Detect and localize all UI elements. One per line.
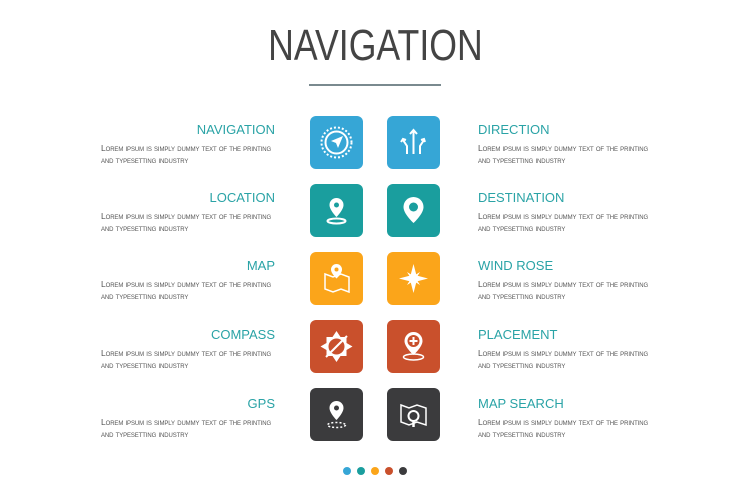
label: map search: MAP SEARCH xyxy=(478,396,564,411)
label: direction: DIRECTION xyxy=(478,122,550,137)
text: gps xyxy=(101,417,271,439)
text: destination: and typesetting industry xyxy=(478,223,565,233)
text: direction: Lorem ipsum is simply dummy text of the printing xyxy=(478,143,648,153)
label: navigation: NAVIGATION xyxy=(197,122,275,137)
label: placement: PLACEMENT xyxy=(478,327,557,342)
icon: destination xyxy=(387,184,440,237)
label: compass: COMPASS xyxy=(211,327,275,342)
icon: map search xyxy=(387,388,440,441)
text: destination: Lorem ipsum is simply dummy text of the printing xyxy=(478,211,648,221)
text: location xyxy=(101,211,271,233)
label: location: LOCATION xyxy=(210,190,275,205)
icon: wind rose xyxy=(387,252,440,305)
text: map: and typesetting industry xyxy=(101,291,188,301)
text: compass: Lorem ipsum is simply dummy text of the printing xyxy=(101,348,271,358)
icon: gps xyxy=(310,388,363,441)
text: compass xyxy=(101,348,271,370)
text: map search xyxy=(478,417,648,439)
label: destination: DESTINATION xyxy=(478,190,564,205)
icon: placement xyxy=(387,320,440,373)
text: gps: and typesetting industry xyxy=(101,429,188,439)
text: map search: and typesetting industry xyxy=(478,429,565,439)
text: destination xyxy=(478,211,648,233)
text: wind rose: Lorem ipsum is simply dummy text of the printing xyxy=(478,279,648,289)
label: map: MAP xyxy=(247,258,275,273)
text: location: and typesetting industry xyxy=(101,223,188,233)
text: navigation: and typesetting industry xyxy=(101,155,188,165)
text: gps: Lorem ipsum is simply dummy text of the printing xyxy=(101,417,271,427)
text: wind rose xyxy=(478,279,648,301)
text: navigation: Lorem ipsum is simply dummy text of the printing xyxy=(101,143,271,153)
text: map: Lorem ipsum is simply dummy text of the printing xyxy=(101,279,271,289)
text: placement: and typesetting industry xyxy=(478,360,565,370)
text: direction: and typesetting industry xyxy=(478,155,565,165)
label: wind rose: WIND ROSE xyxy=(478,258,553,273)
pagination dots xyxy=(343,467,407,475)
text: navigation xyxy=(101,143,271,165)
text: placement: Lorem ipsum is simply dummy text of the printing xyxy=(478,348,648,358)
icon: compass xyxy=(310,320,363,373)
text: map xyxy=(101,279,271,301)
icon: navigation xyxy=(310,116,363,169)
icon: location xyxy=(310,184,363,237)
text: map search: Lorem ipsum is simply dummy text of the printing xyxy=(478,417,648,427)
text: compass: and typesetting industry xyxy=(101,360,188,370)
text: wind rose: and typesetting industry xyxy=(478,291,565,301)
label: gps: GPS xyxy=(248,396,275,411)
text: location: Lorem ipsum is simply dummy text of the printing xyxy=(101,211,271,221)
icon: direction xyxy=(387,116,440,169)
title: NAVIGATION xyxy=(268,21,482,70)
text: placement xyxy=(478,348,648,370)
icon: map xyxy=(310,252,363,305)
text: direction xyxy=(478,143,648,165)
